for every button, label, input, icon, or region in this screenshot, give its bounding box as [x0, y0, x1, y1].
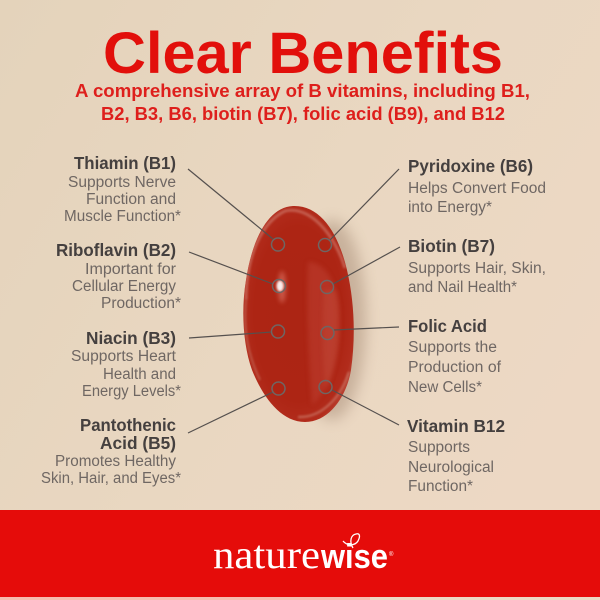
- callout: Niacin (B3): Health and: [103, 366, 176, 383]
- callout: Folic Acid: Folic Acid: [408, 316, 487, 336]
- callout: Riboflavin (B2): Production*: [101, 295, 181, 312]
- logo: naturewise: wise: [320, 538, 388, 576]
- callout: Thiamin (B1): [64, 153, 284, 251]
- callout: Vitamin B12: [319, 380, 505, 495]
- callout: Pyridoxine (B6): Helps Convert Food: [408, 180, 546, 197]
- callout: Pyridoxine (B6): Pyridoxine (B6): [408, 156, 533, 176]
- callout: Niacin (B3): Energy Levels*: [82, 383, 181, 400]
- callout: Riboflavin (B2): Important for: [85, 261, 176, 278]
- callout: Biotin (B7): [320, 236, 546, 296]
- callout: Niacin (B3): [71, 325, 284, 400]
- callout: Riboflavin (B2): Riboflavin (B2): [56, 240, 176, 260]
- callout: Pantothenic Acid (B5): [41, 382, 285, 487]
- logo: naturewise: [213, 532, 394, 577]
- logo: naturewise: ®: [389, 551, 394, 558]
- callout: Pantothenic Acid (B5): Pantothenic: [80, 415, 176, 435]
- pill capsule: [243, 206, 366, 422]
- subtitle: [75, 80, 530, 124]
- callout: Folic Acid: New Cells*: [408, 379, 482, 396]
- callout: Biotin (B7): Biotin (B7): [408, 236, 495, 256]
- callout: Pantothenic Acid (B5): Promotes Healthy: [55, 453, 176, 470]
- callout: Niacin (B3): Supports Heart: [71, 348, 177, 365]
- callout: Niacin (B3): Niacin (B3): [86, 328, 176, 348]
- callout: Thiamin (B1): Supports Nerve: [68, 174, 176, 191]
- callout: Vitamin B12: Supports: [408, 439, 470, 456]
- callout: Vitamin B12: Vitamin B12: [407, 416, 505, 436]
- callout: Pantothenic Acid (B5): Skin, Hair, and Eyes*: [41, 470, 181, 487]
- callout: Pyridoxine (B6): [318, 156, 546, 252]
- callout: Thiamin (B1): Thiamin (B1): [74, 153, 176, 173]
- callout: Riboflavin (B2): Cellular Energy: [72, 278, 176, 295]
- callout: Biotin (B7): and Nail Health*: [408, 279, 517, 296]
- subtitle: A comprehensive array of B vitamins, including B1,: [75, 80, 530, 101]
- bottom strip: [0, 597, 600, 600]
- callout: Vitamin B12: Function*: [408, 478, 473, 495]
- callout: Folic Acid: [321, 316, 502, 396]
- footer band: [0, 510, 600, 597]
- title: Clear Benefits: [103, 21, 503, 86]
- callout: Folic Acid: Supports the: [408, 339, 497, 356]
- callout: Riboflavin (B2): [56, 240, 286, 312]
- callout: Thiamin (B1): Muscle Function*: [64, 208, 181, 225]
- callout: Folic Acid: Production of: [408, 359, 502, 376]
- subtitle: B2, B3, B6, biotin (B7), folic acid (B9), and B12: [101, 103, 505, 124]
- callout: Biotin (B7): Supports Hair, Skin,: [408, 260, 546, 277]
- callout: Pyridoxine (B6): into Energy*: [408, 199, 492, 216]
- logo: naturewise: nature: [213, 532, 320, 577]
- callout: Vitamin B12: Neurological: [408, 459, 494, 476]
- callout: Thiamin (B1): Function and: [86, 191, 176, 208]
- callout: Pantothenic Acid (B5): Acid (B5): [100, 433, 176, 453]
